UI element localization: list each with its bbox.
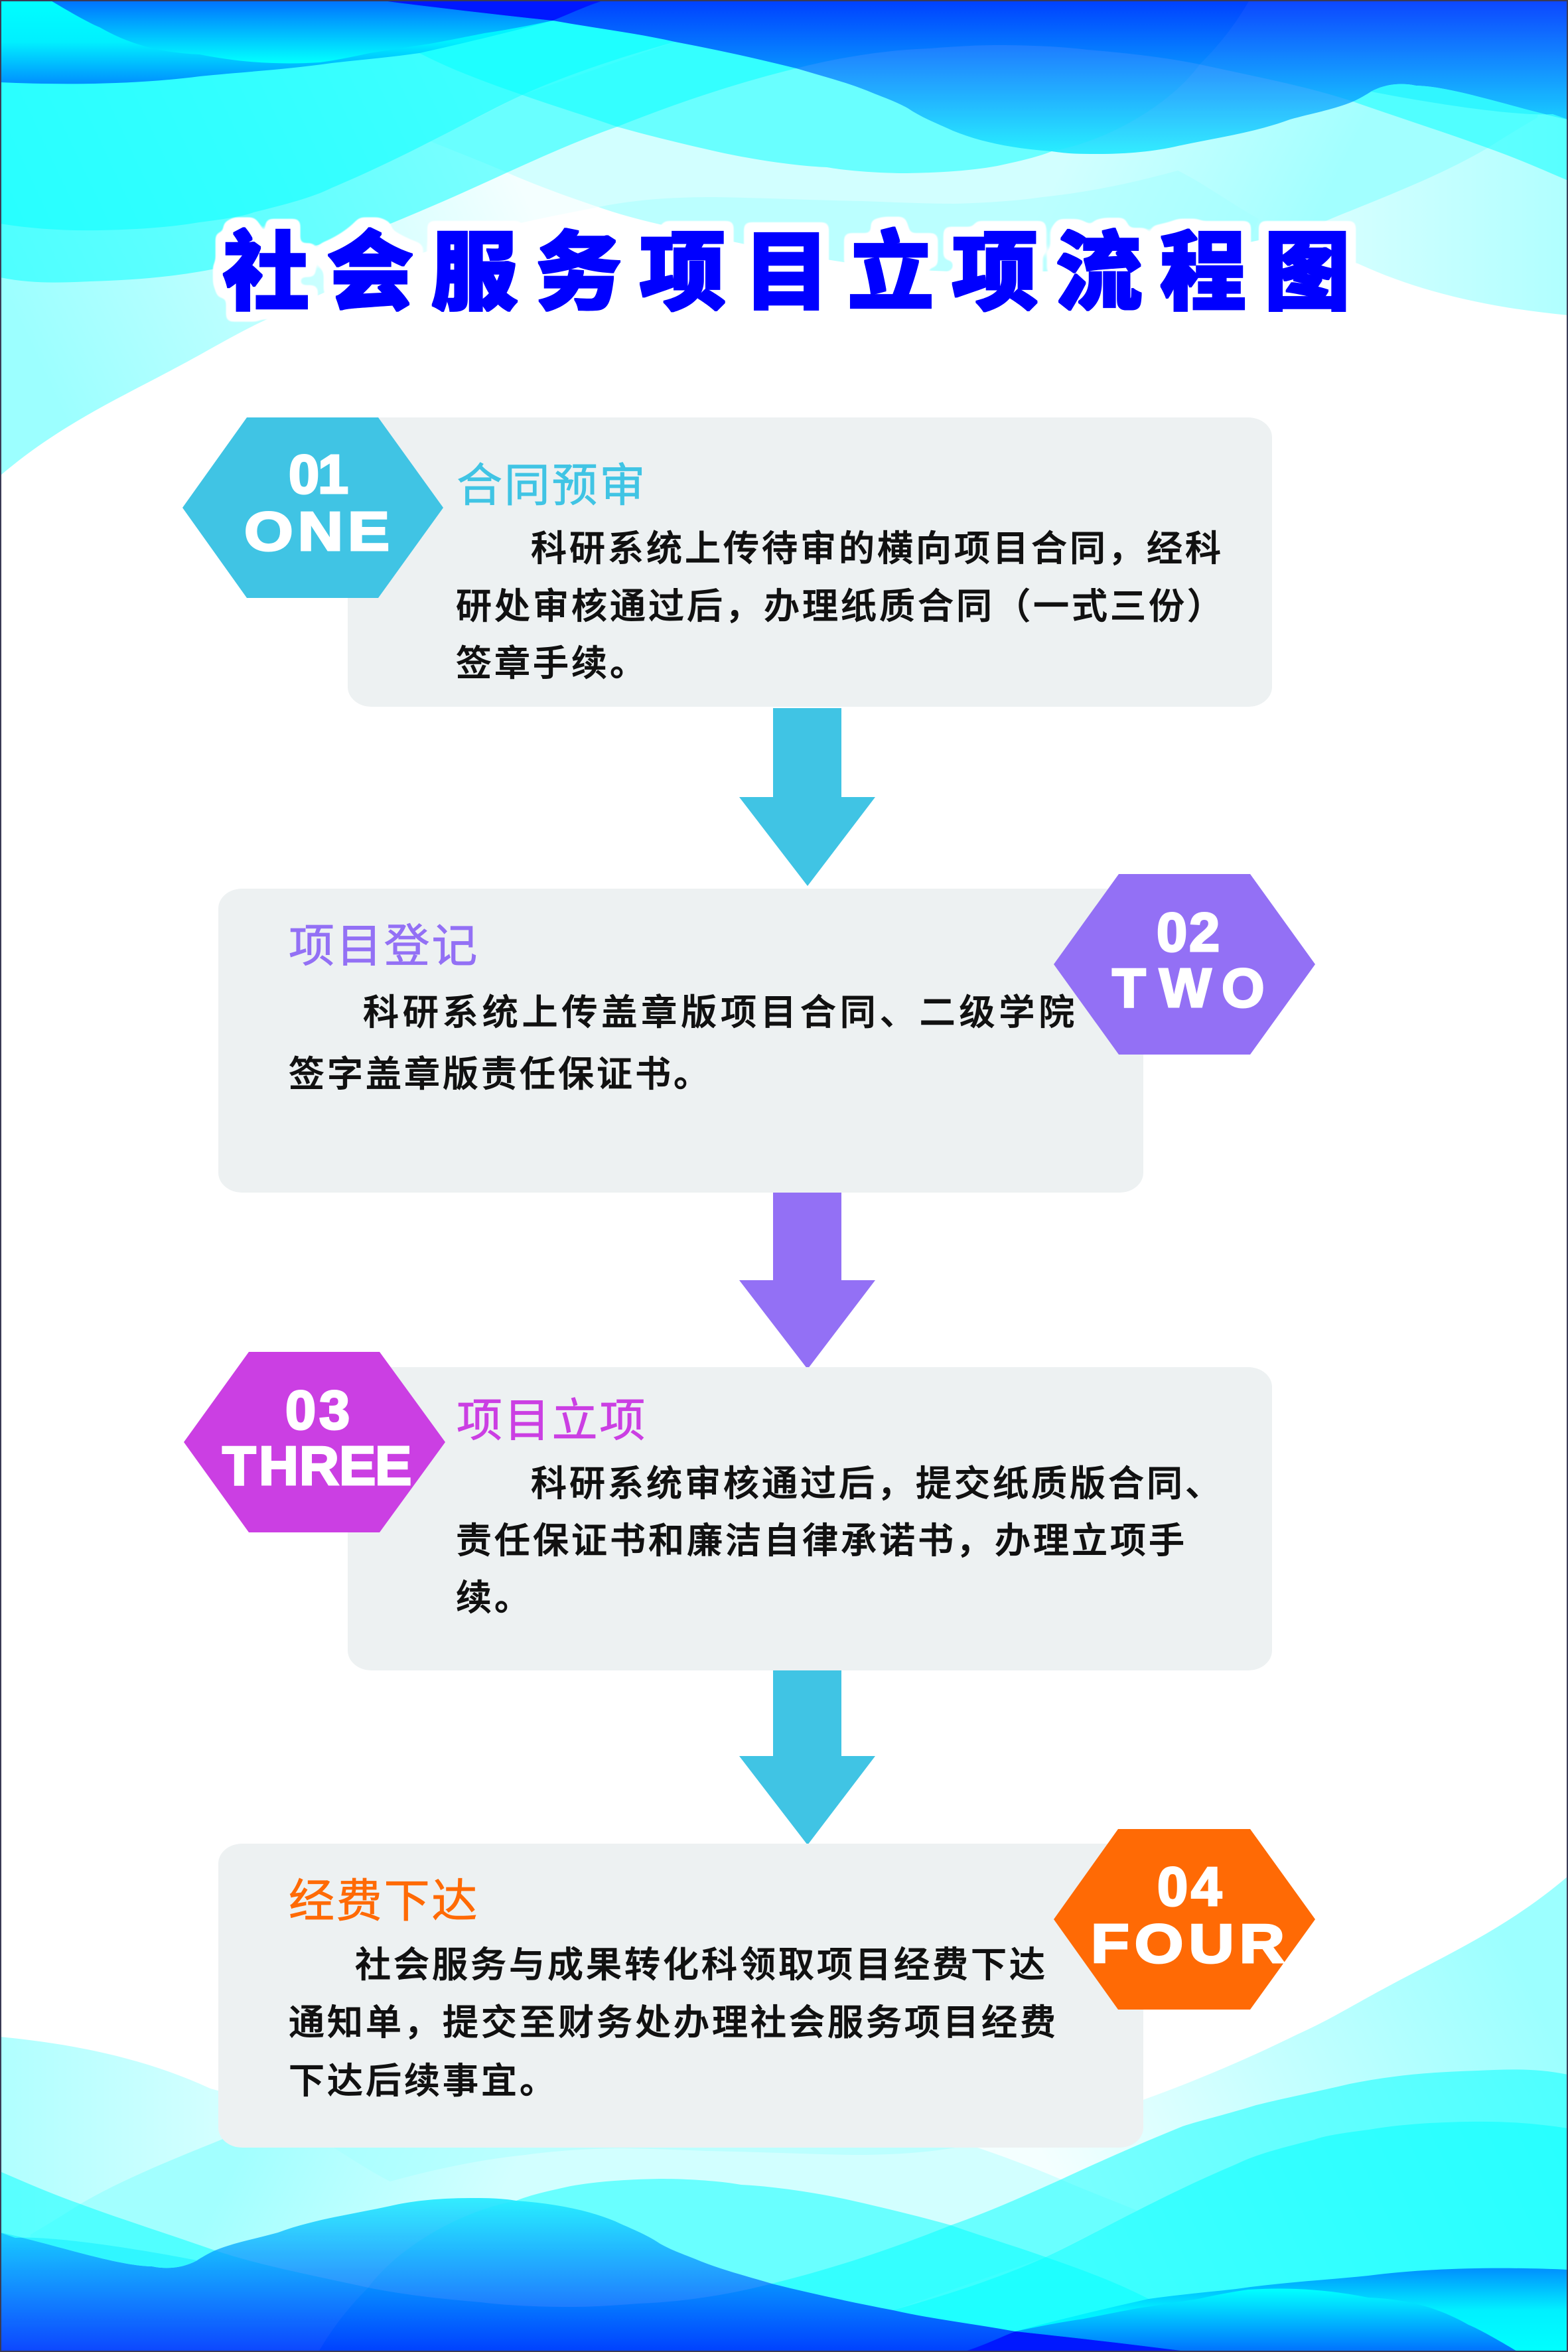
arrow: step 2 to 3 — [739, 1192, 875, 1369]
heading: project approval: 项目立项 — [457, 1395, 647, 1446]
panel: step 2 project registration — [218, 874, 1315, 1193]
hexagon badge 01 ONE: 01 — [289, 443, 348, 505]
title: 社会服务项目立项流程图 — [223, 224, 1350, 321]
hexagon badge 04 FOUR: 04 — [1157, 1856, 1222, 1917]
body text: contract review: 研处审核通过后，办理纸质合同（一式三份） — [456, 587, 1226, 626]
panel: step 1 contract review — [182, 417, 1272, 707]
body text: project registration: 科研系统上传盖章版项目合同、二级学院 — [363, 993, 1078, 1033]
body text: project registration — [289, 993, 1078, 1094]
body text: funds release — [289, 1945, 1058, 2101]
hexagon badge 04 FOUR: FOUR — [1091, 1913, 1290, 1974]
body text: project registration: 签字盖章版责任保证书。 — [289, 1055, 712, 1094]
hexagon badge 02 TWO — [1054, 874, 1315, 1055]
body text: contract review: 科研系统上传待审的横向项目合同，经科 — [531, 529, 1224, 569]
hexagon badge 02 TWO: 02 — [1157, 901, 1220, 963]
heading: contract review: 合同预审 — [457, 460, 647, 511]
body text: project approval — [456, 1464, 1224, 1618]
hexagon badge 03 THREE: 03 — [285, 1379, 350, 1441]
panel: step 4 funds release — [218, 1829, 1315, 2148]
hexagon badge 03 THREE: THREE — [222, 1435, 411, 1497]
arrow: step 3 to 4 — [739, 1668, 875, 1845]
heading: project registration: 项目登记 — [289, 920, 479, 972]
hexagon badge 01 ONE: ONE — [244, 500, 394, 562]
body text: funds release: 社会服务与成果转化科领取项目经费下达 — [355, 1945, 1048, 1985]
body text: contract review: 签章手续。 — [456, 644, 648, 684]
body text: funds release: 通知单，提交至财务处办理社会服务项目经费 — [289, 2003, 1058, 2043]
hexagon badge 04 FOUR — [1054, 1829, 1315, 2010]
body text: funds release: 下达后续事宜。 — [289, 2061, 558, 2101]
panel: step 3 project approval — [184, 1352, 1272, 1670]
body text: project approval: 科研系统审核通过后，提交纸质版合同、 — [531, 1464, 1224, 1504]
background waves: top — [0, 0, 1568, 476]
hexagon badge 02 TWO: TWO — [1112, 957, 1265, 1019]
hexagon badge 03 THREE — [184, 1352, 445, 1532]
hexagon badge 01 ONE — [182, 417, 443, 598]
body text: project approval: 责任保证书和廉洁自律承诺书，办理立项手 — [456, 1521, 1187, 1561]
arrow: step 1 to 2 — [739, 708, 875, 886]
body text: project approval: 续。 — [456, 1578, 533, 1618]
heading: funds release: 经费下达 — [289, 1875, 479, 1927]
background waves: bottom (rotated copy of top) — [0, 1876, 1568, 2352]
body text: contract review — [456, 529, 1226, 684]
